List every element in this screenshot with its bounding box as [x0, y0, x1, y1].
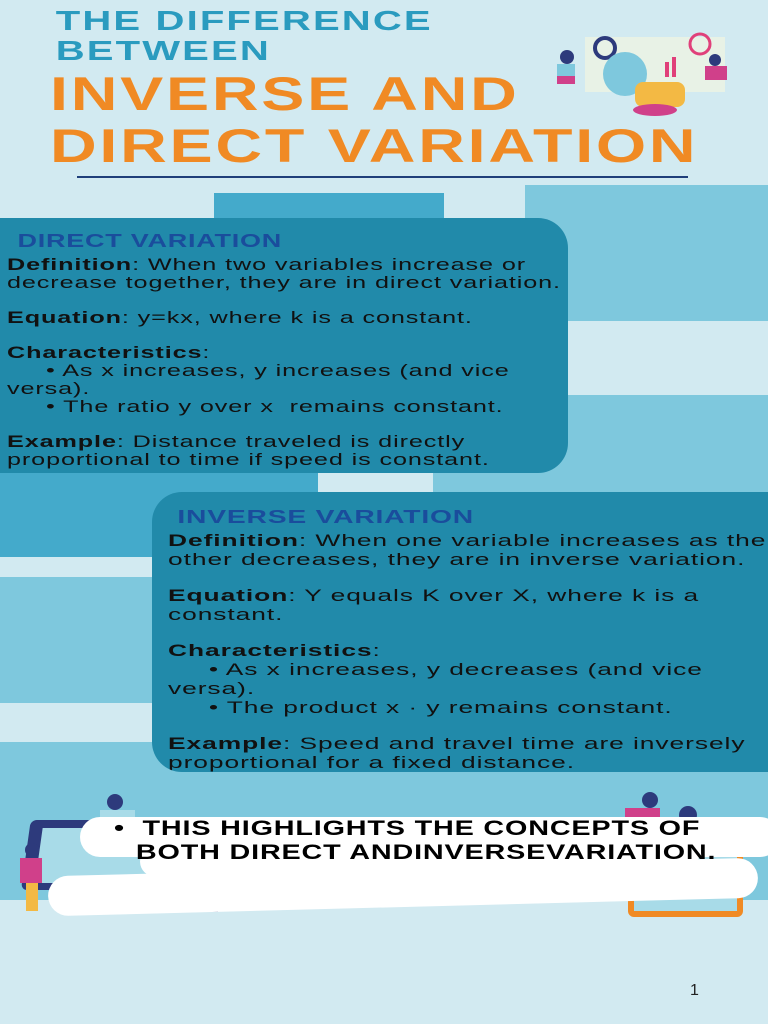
heading: direct variation: DIRECT VARIATION — [18, 231, 282, 251]
panel: direct variation: versa). — [7, 379, 90, 398]
icon: team illustration — [557, 32, 727, 116]
icon: right people illustration — [625, 792, 743, 917]
panel: direct variation: Equation: y=kx, where k is a constant. — [7, 308, 473, 327]
panel: direct variation — [0, 218, 568, 473]
callout: brush stroke summary: • THIS HIGHLIGHTS THE CONCEPTS OF — [114, 817, 700, 840]
callout: brush stroke summary: BOTH DIRECT ANDINVERSEVARIATION. — [136, 841, 716, 864]
page number: 1 — [690, 982, 699, 999]
panel: direct variation: Characteristics: — [7, 343, 210, 362]
panel: direct variation: decrease together, they are in direct variation. — [7, 273, 561, 292]
title — [50, 5, 698, 172]
panel: direct variation: • The ratio y over x remains constant. — [46, 397, 504, 416]
panel: inverse variation: • As x increases, y decreases (and vice — [209, 660, 703, 679]
panel: inverse variation: • The product x · y remains constant. — [209, 698, 673, 717]
panel: inverse variation: constant. — [168, 605, 283, 624]
heading: inverse variation: INVERSE VARIATION — [177, 507, 474, 527]
panel: inverse variation: proportional for a fixed distance. — [168, 753, 575, 772]
panel: inverse variation: Definition: When one variable increases as the — [168, 531, 766, 550]
panel: direct variation: Definition: When two variables increase or — [7, 255, 526, 274]
title: THE DIFFERENCE — [56, 5, 433, 36]
icon: left people illustration — [20, 794, 218, 912]
panel: inverse variation: other decreases, they are in inverse variation. — [168, 550, 745, 569]
panel: inverse variation: Equation: Y equals K over X, where k is a — [168, 586, 699, 605]
panel: direct variation: proportional to time if speed is constant. — [7, 450, 490, 469]
title: INVERSE AND — [50, 67, 520, 120]
panel: inverse variation: Characteristics: — [168, 641, 381, 660]
panel: direct variation: • As x increases, y increases (and vice — [46, 361, 510, 380]
title: BETWEEN — [56, 35, 271, 66]
title: DIRECT VARIATION — [50, 119, 698, 172]
callout: brush stroke summary — [48, 817, 768, 916]
panel: direct variation: Example: Distance traveled is directly — [7, 432, 465, 451]
panel: inverse variation — [152, 492, 768, 772]
panel: inverse variation: versa). — [168, 679, 255, 698]
panel: inverse variation: Example: Speed and travel time are inversely — [168, 734, 745, 753]
